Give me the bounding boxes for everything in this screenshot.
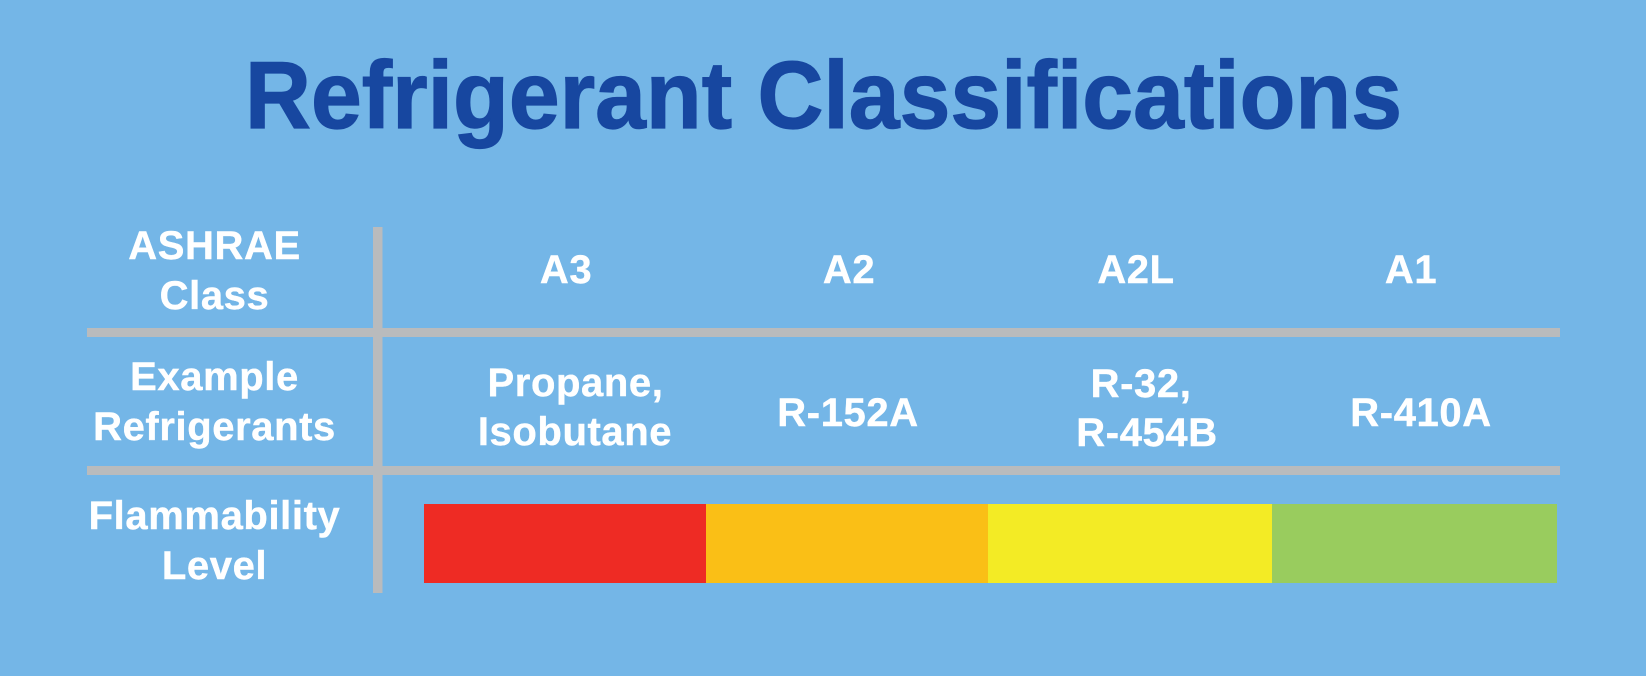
- row header: Example Refrigerants: Example: [130, 355, 299, 399]
- row header: ASHRAE Class: [128, 224, 301, 318]
- row header: ASHRAE Class: ASHRAE: [128, 224, 301, 268]
- row header: Flammability Level: Flammability: [89, 494, 341, 538]
- class label: A2L: A2L: [1097, 248, 1175, 292]
- example: R-32, R-454B: [1076, 362, 1218, 455]
- example: R-32, R-454B: R-32,: [1091, 362, 1191, 406]
- class label: A1: A1: [1385, 248, 1437, 292]
- title: Refrigerant Classifications: [245, 42, 1402, 149]
- example: R-32, R-454B: R-454B: [1076, 411, 1218, 455]
- flammability level colour bar: [424, 504, 1557, 583]
- example: Propane, Isobutane: Isobutane: [478, 410, 672, 454]
- row header: Example Refrigerants: Refrigerants: [93, 405, 336, 449]
- row header: Example Refrigerants: [93, 355, 336, 449]
- row header: Flammability Level: Level: [162, 544, 267, 588]
- bar segment: orange, A2: [706, 504, 988, 583]
- row header: ASHRAE Class: Class: [160, 274, 269, 318]
- table grid lines: [87, 227, 1560, 593]
- example: Propane, Isobutane: Propane,: [488, 361, 663, 405]
- example: R-410A: R-410A: [1350, 391, 1492, 435]
- bar segment: yellow, A2L: [988, 504, 1272, 583]
- example: Propane, Isobutane: [478, 361, 672, 454]
- class label: A3: A3: [540, 248, 592, 292]
- bar segment: red, A3: [424, 504, 706, 583]
- example: R-152A: R-152A: [777, 391, 919, 435]
- class label: A2: A2: [823, 248, 875, 292]
- row header: Flammability Level: [89, 494, 341, 588]
- bar segment: green, A1: [1272, 504, 1557, 583]
